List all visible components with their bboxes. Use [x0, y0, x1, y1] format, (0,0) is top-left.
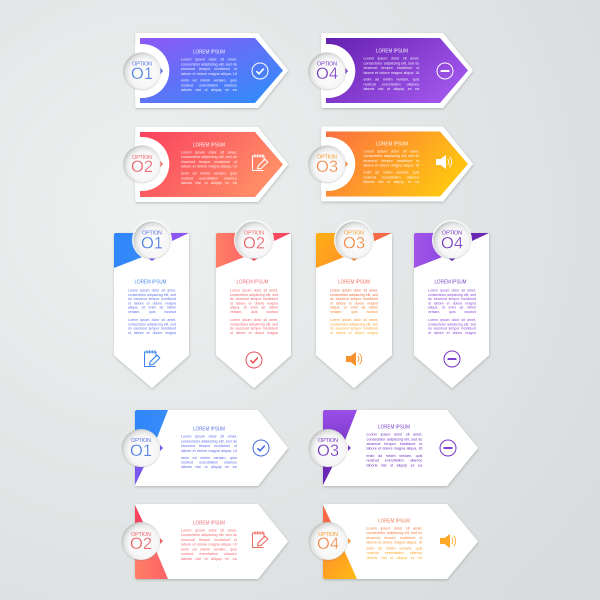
panel: vertical card option 02: aliqua. Ut enim ad minim [230, 306, 278, 310]
panel: white arrow option 01: O1 [130, 442, 152, 460]
panel: top arrow option 03: consectetur adipiscing elit, sed do [364, 154, 419, 158]
panel: top arrow option 03: labore et dolore magna aliqua. Ut [364, 164, 419, 168]
panel: vertical card option 04 [414, 220, 489, 387]
panel: vertical card option 03 [316, 220, 392, 387]
panel: white arrow option 03: Lorem ipsum dolor sit amet, [366, 433, 422, 437]
panel: white arrow option 03 [309, 410, 477, 485]
panel: white arrow option 04: laboris nisi ut aliquip ex ea [366, 556, 423, 560]
panel: top arrow option 04 [308, 34, 472, 107]
panel: white arrow option 03: OPTION [318, 438, 338, 444]
panel: vertical card option 01: Lorem ipsum dolor sit amet, [128, 289, 176, 293]
panel: top arrow option 03: nostrud exercitation ullamco [364, 175, 419, 179]
panel: top arrow option 02: laboris nisi ut aliquip ex ea [181, 181, 238, 185]
panel: top arrow option 04: Lorem ipsum dolor sit amet, [364, 57, 419, 61]
panel: vertical card option 04: ut labore et dolore magna [428, 301, 476, 305]
panel: white arrow option 01: eiusmod tempor incididunt ut [181, 444, 237, 448]
panel: top arrow option 02: labore et dolore magna aliqua. Ut [181, 165, 237, 169]
panel: white arrow option 03: consectetur adipiscing elit, sed do [366, 437, 422, 441]
panel: top arrow option 02: LOREM IPSUM [193, 142, 225, 148]
panel: vertical card option 04: consectetur adipiscing elit, sed [428, 322, 476, 326]
panel: white arrow option 03: O3 [317, 442, 339, 460]
panel: vertical card option 02: do eiusmod tempor incididunt [230, 327, 278, 331]
panel: vertical card option 01: O1 [141, 234, 163, 252]
panel: vertical card option 01: veniam, quis nostrud [128, 310, 176, 314]
panel: vertical card option 04: OPTION [442, 230, 462, 236]
panel: top arrow option 04: LOREM IPSUM [376, 48, 408, 54]
panel: top arrow option 04: enim ad minim veniam, quis [364, 78, 420, 82]
panel: vertical card option 02: do eiusmod tempor incididunt [230, 297, 278, 301]
panel: white arrow option 04: eiusmod tempor incididunt ut [366, 536, 422, 540]
panel: top arrow option 04: laboris nisi ut aliquip ex ea [364, 87, 420, 91]
panel: white arrow option 02: enim ad minim veniam, quis [181, 548, 237, 552]
panel: white arrow option 02: laboris nisi ut aliquip ex ea [181, 557, 238, 561]
panel: vertical card option 01: ut labore et dolore magna [128, 301, 176, 305]
panel: white arrow option 04: O4 [317, 535, 339, 553]
panel: vertical card option 02: Lorem ipsum dolor sit amet, [230, 289, 278, 293]
panel: vertical card option 04: do eiusmod tempor incididunt [428, 297, 476, 301]
panel: top arrow option 01 [124, 34, 287, 107]
panel: white arrow option 01: laboris nisi ut aliquip ex ea [181, 465, 238, 469]
panel: white arrow option 01: LOREM IPSUM [193, 426, 225, 432]
panel: white arrow option 04: enim ad minim veniam, quis [366, 547, 423, 551]
panel: top arrow option 04: O4 [316, 65, 338, 83]
panel: white arrow option 02: Lorem ipsum dolor sit amet, [181, 529, 237, 533]
panel: white arrow option 02: nostrud exercitation ullamco [181, 552, 237, 556]
panel: vertical card option 03: veniam, quis nostrud [330, 310, 378, 314]
panel: vertical card option 03: do eiusmod tempor incididunt [330, 327, 378, 331]
panel: top arrow option 01: consectetur adipiscing elit, sed do [181, 62, 237, 66]
panel: vertical card option 03: Lorem ipsum dolor sit amet, [330, 318, 378, 322]
panel: white arrow option 04: LOREM IPSUM [378, 518, 410, 524]
panel: vertical card option 01: LOREM IPSUM [134, 279, 167, 285]
panel: vertical card option 02: ut labore et dolore magna [230, 331, 278, 335]
panel: vertical card option 02: ut labore et dolore magna [230, 301, 278, 305]
panel: top arrow option 03: enim ad minim veniam, quis [364, 171, 420, 175]
panel: vertical card option 02: OPTION [244, 230, 264, 236]
panel: white arrow option 02: O2 [130, 535, 152, 553]
panel: vertical card option 02: LOREM IPSUM [236, 279, 269, 285]
panel: white arrow option 04: nostrud exercitation ullamco [366, 551, 422, 555]
panel: top arrow option 03: O3 [316, 158, 338, 176]
panel: vertical card option 03: Lorem ipsum dolor sit amet, [330, 289, 378, 293]
panel: vertical card option 03: ut labore et dolore magna [330, 301, 378, 305]
panel: vertical card option 04: veniam, quis nostrud [428, 310, 476, 314]
panel: top arrow option 01: eiusmod tempor incididunt ut [181, 67, 237, 71]
panel: white arrow option 03: enim ad minim veniam, quis [366, 454, 423, 458]
panel: white arrow option 03: laboris nisi ut aliquip ex ea [366, 463, 423, 467]
panel: top arrow option 04: consectetur adipiscing elit, sed do [364, 61, 419, 65]
panel: vertical card option 04: LOREM IPSUM [434, 279, 467, 285]
panel: top arrow option 04: OPTION [317, 62, 337, 68]
panel: top arrow option 01: enim ad minim veniam, quis [181, 79, 237, 83]
panel: vertical card option 03: consectetur adipiscing elit, sed [330, 293, 378, 297]
panel: top arrow option 03: LOREM IPSUM [376, 141, 408, 147]
panel: white arrow option 04: OPTION [318, 532, 338, 538]
panel: vertical card option 01: OPTION [142, 230, 162, 236]
panel: vertical card option 03: do eiusmod tempor incididunt [330, 297, 378, 301]
panel: top arrow option 02: Lorem ipsum dolor sit amet, [181, 151, 237, 155]
panel: top arrow option 01: labore et dolore magna aliqua. Ut [181, 72, 237, 76]
panel: white arrow option 01: OPTION [131, 438, 151, 444]
panel: top arrow option 03: Lorem ipsum dolor sit amet, [364, 150, 419, 154]
panel: white arrow option 01: nostrud exercitation ullamco [181, 461, 237, 465]
panel: top arrow option 02: eiusmod tempor incididunt ut [181, 160, 237, 164]
panel: vertical card option 02: veniam, quis nostrud [230, 310, 278, 314]
panel: vertical card option 04: do eiusmod tempor incididunt [428, 327, 476, 331]
panel: vertical card option 02: consectetur adipiscing elit, sed [230, 322, 278, 326]
panel: vertical card option 01: Lorem ipsum dolor sit amet, [128, 318, 176, 322]
panel: vertical card option 04: Lorem ipsum dolor sit amet, [428, 318, 476, 322]
panel: vertical card option 03: aliqua. Ut enim ad minim [330, 306, 378, 310]
panel: white arrow option 01 [122, 410, 287, 485]
panel: white arrow option 02: eiusmod tempor incididunt ut [181, 538, 237, 542]
panel: white arrow option 02: OPTION [131, 532, 151, 538]
panel: white arrow option 03: eiusmod tempor incididunt ut [366, 442, 422, 446]
panel: top arrow option 02: consectetur adipiscing elit, sed do [181, 155, 237, 159]
panel: top arrow option 02: O2 [131, 158, 153, 176]
panel: white arrow option 03: LOREM IPSUM [378, 424, 410, 430]
panel: white arrow option 01: Lorem ipsum dolor sit amet, [181, 435, 237, 439]
panel: vertical card option 01: do eiusmod tempor incididunt [128, 327, 176, 331]
panel: white arrow option 04: labore et dolore magna aliqua. Ut [366, 540, 422, 544]
panel: vertical card option 02: O2 [243, 234, 265, 252]
panel: vertical card option 01: ut labore et dolore magna [128, 331, 176, 335]
panel: top arrow option 02: nostrud exercitation ullamco [181, 176, 237, 180]
panel: top arrow option 03 [308, 127, 472, 201]
panel: vertical card option 04: O4 [441, 234, 463, 252]
panel: top arrow option 01: LOREM IPSUM [193, 49, 225, 55]
panel: white arrow option 02 [122, 505, 287, 579]
panel: vertical card option 01: do eiusmod tempor incididunt [128, 297, 176, 301]
panel: top arrow option 02: enim ad minim veniam, quis [181, 172, 237, 176]
panel: vertical card option 02: Lorem ipsum dolor sit amet, [230, 318, 278, 322]
panel: top arrow option 01: OPTION [132, 62, 152, 68]
panel: white arrow option 02: labore et dolore magna aliqua. Ut [181, 542, 237, 546]
panel: white arrow option 02: LOREM IPSUM [193, 520, 225, 526]
panel: top arrow option 03: OPTION [317, 154, 337, 160]
panel: vertical card option 04: Lorem ipsum dolor sit amet, [428, 289, 476, 293]
panel: top arrow option 03: eiusmod tempor incididunt ut [364, 159, 419, 163]
panel: vertical card option 01: aliqua. Ut enim ad minim [128, 306, 176, 310]
panel: vertical card option 02 [216, 220, 291, 387]
panel: vertical card option 01: consectetur adipiscing elit, sed [128, 322, 176, 326]
panel: top arrow option 01: laboris nisi ut aliquip ex ea [181, 88, 238, 92]
panel: vertical card option 03: LOREM IPSUM [338, 279, 370, 285]
panel: vertical card option 03: consectetur adipiscing elit, sed [330, 322, 378, 326]
panel: top arrow option 03: laboris nisi ut aliquip ex ea [364, 180, 420, 184]
panel: vertical card option 03: O3 [343, 234, 365, 252]
panel: vertical card option 04: ut labore et dolore magna [428, 331, 476, 335]
panel: white arrow option 04: consectetur adipiscing elit, sed do [366, 531, 422, 535]
panel: top arrow option 01: Lorem ipsum dolor sit amet, [181, 58, 237, 62]
panel: white arrow option 03: nostrud exercitation ullamco [366, 459, 422, 463]
panel: vertical card option 03: OPTION [344, 230, 364, 236]
panel: vertical card option 02: consectetur adipiscing elit, sed [230, 293, 278, 297]
panel: vertical card option 04: aliqua. Ut enim ad minim [428, 306, 476, 310]
panel: white arrow option 01: labore et dolore magna aliqua. Ut [181, 449, 237, 453]
panel: top arrow option 04: labore et dolore magna aliqua. Ut [364, 71, 419, 75]
panel: vertical card option 03: ut labore et dolore magna [330, 331, 378, 335]
panel: vertical card option 04: consectetur adipiscing elit, sed [428, 293, 476, 297]
panel: white arrow option 03: labore et dolore magna aliqua. Ut [366, 447, 422, 451]
panel: top arrow option 04: eiusmod tempor incididunt ut [364, 66, 419, 70]
panel: white arrow option 02: consectetur adipiscing elit, sed do [181, 533, 237, 537]
panel: top arrow option 01: nostrud exercitation ullamco [181, 83, 237, 87]
panel: white arrow option 04 [309, 505, 477, 579]
panel: vertical card option 01 [114, 220, 189, 387]
panel: top arrow option 01: O1 [131, 65, 153, 83]
panel: top arrow option 02: OPTION [132, 155, 152, 161]
panel: vertical card option 01: consectetur adipiscing elit, sed [128, 293, 176, 297]
panel: white arrow option 01: consectetur adipiscing elit, sed do [181, 439, 237, 443]
panel: top arrow option 02 [124, 128, 287, 201]
panel: white arrow option 04: Lorem ipsum dolor sit amet, [366, 527, 422, 531]
panel: top arrow option 04: nostrud exercitation ullamco [364, 82, 419, 86]
panel: white arrow option 01: enim ad minim veniam, quis [181, 456, 237, 460]
